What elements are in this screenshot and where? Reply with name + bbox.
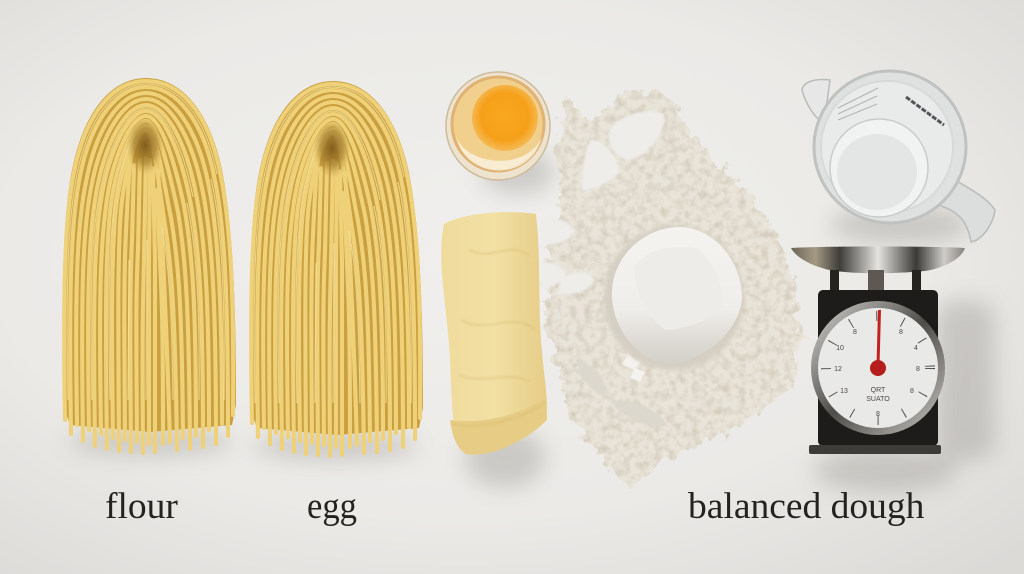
dial numbers: 10 (836, 345, 844, 352)
dial numbers: 8 (876, 411, 880, 418)
noodle bundle: egg (250, 81, 423, 456)
dial numbers: 4 (914, 345, 918, 352)
flour mound (604, 226, 744, 370)
dial numbers: QRT (871, 387, 886, 394)
flour gaps (539, 111, 664, 294)
kitchen scale (791, 246, 965, 454)
label: flour: flour (105, 486, 178, 527)
dial numbers: 8 (916, 366, 920, 373)
dial numbers: 13 (840, 388, 848, 395)
scale dial (811, 301, 945, 435)
measuring cup with water (802, 71, 995, 242)
dial numbers: 8 (899, 329, 903, 336)
dough roll (441, 212, 547, 455)
icon: egg yolk in glass bowl (446, 72, 550, 180)
label: egg: egg (307, 486, 357, 527)
flour pile (539, 90, 800, 490)
dial numbers (834, 329, 920, 418)
dial numbers: 8 (853, 329, 857, 336)
dial numbers: 12 (834, 366, 842, 373)
shadows (68, 150, 995, 492)
label: balanced dough: balanced dough (688, 486, 925, 527)
noodle bundle: flour (63, 78, 236, 453)
dial numbers: SUATO (866, 396, 890, 403)
dial numbers: 8 (910, 388, 914, 395)
